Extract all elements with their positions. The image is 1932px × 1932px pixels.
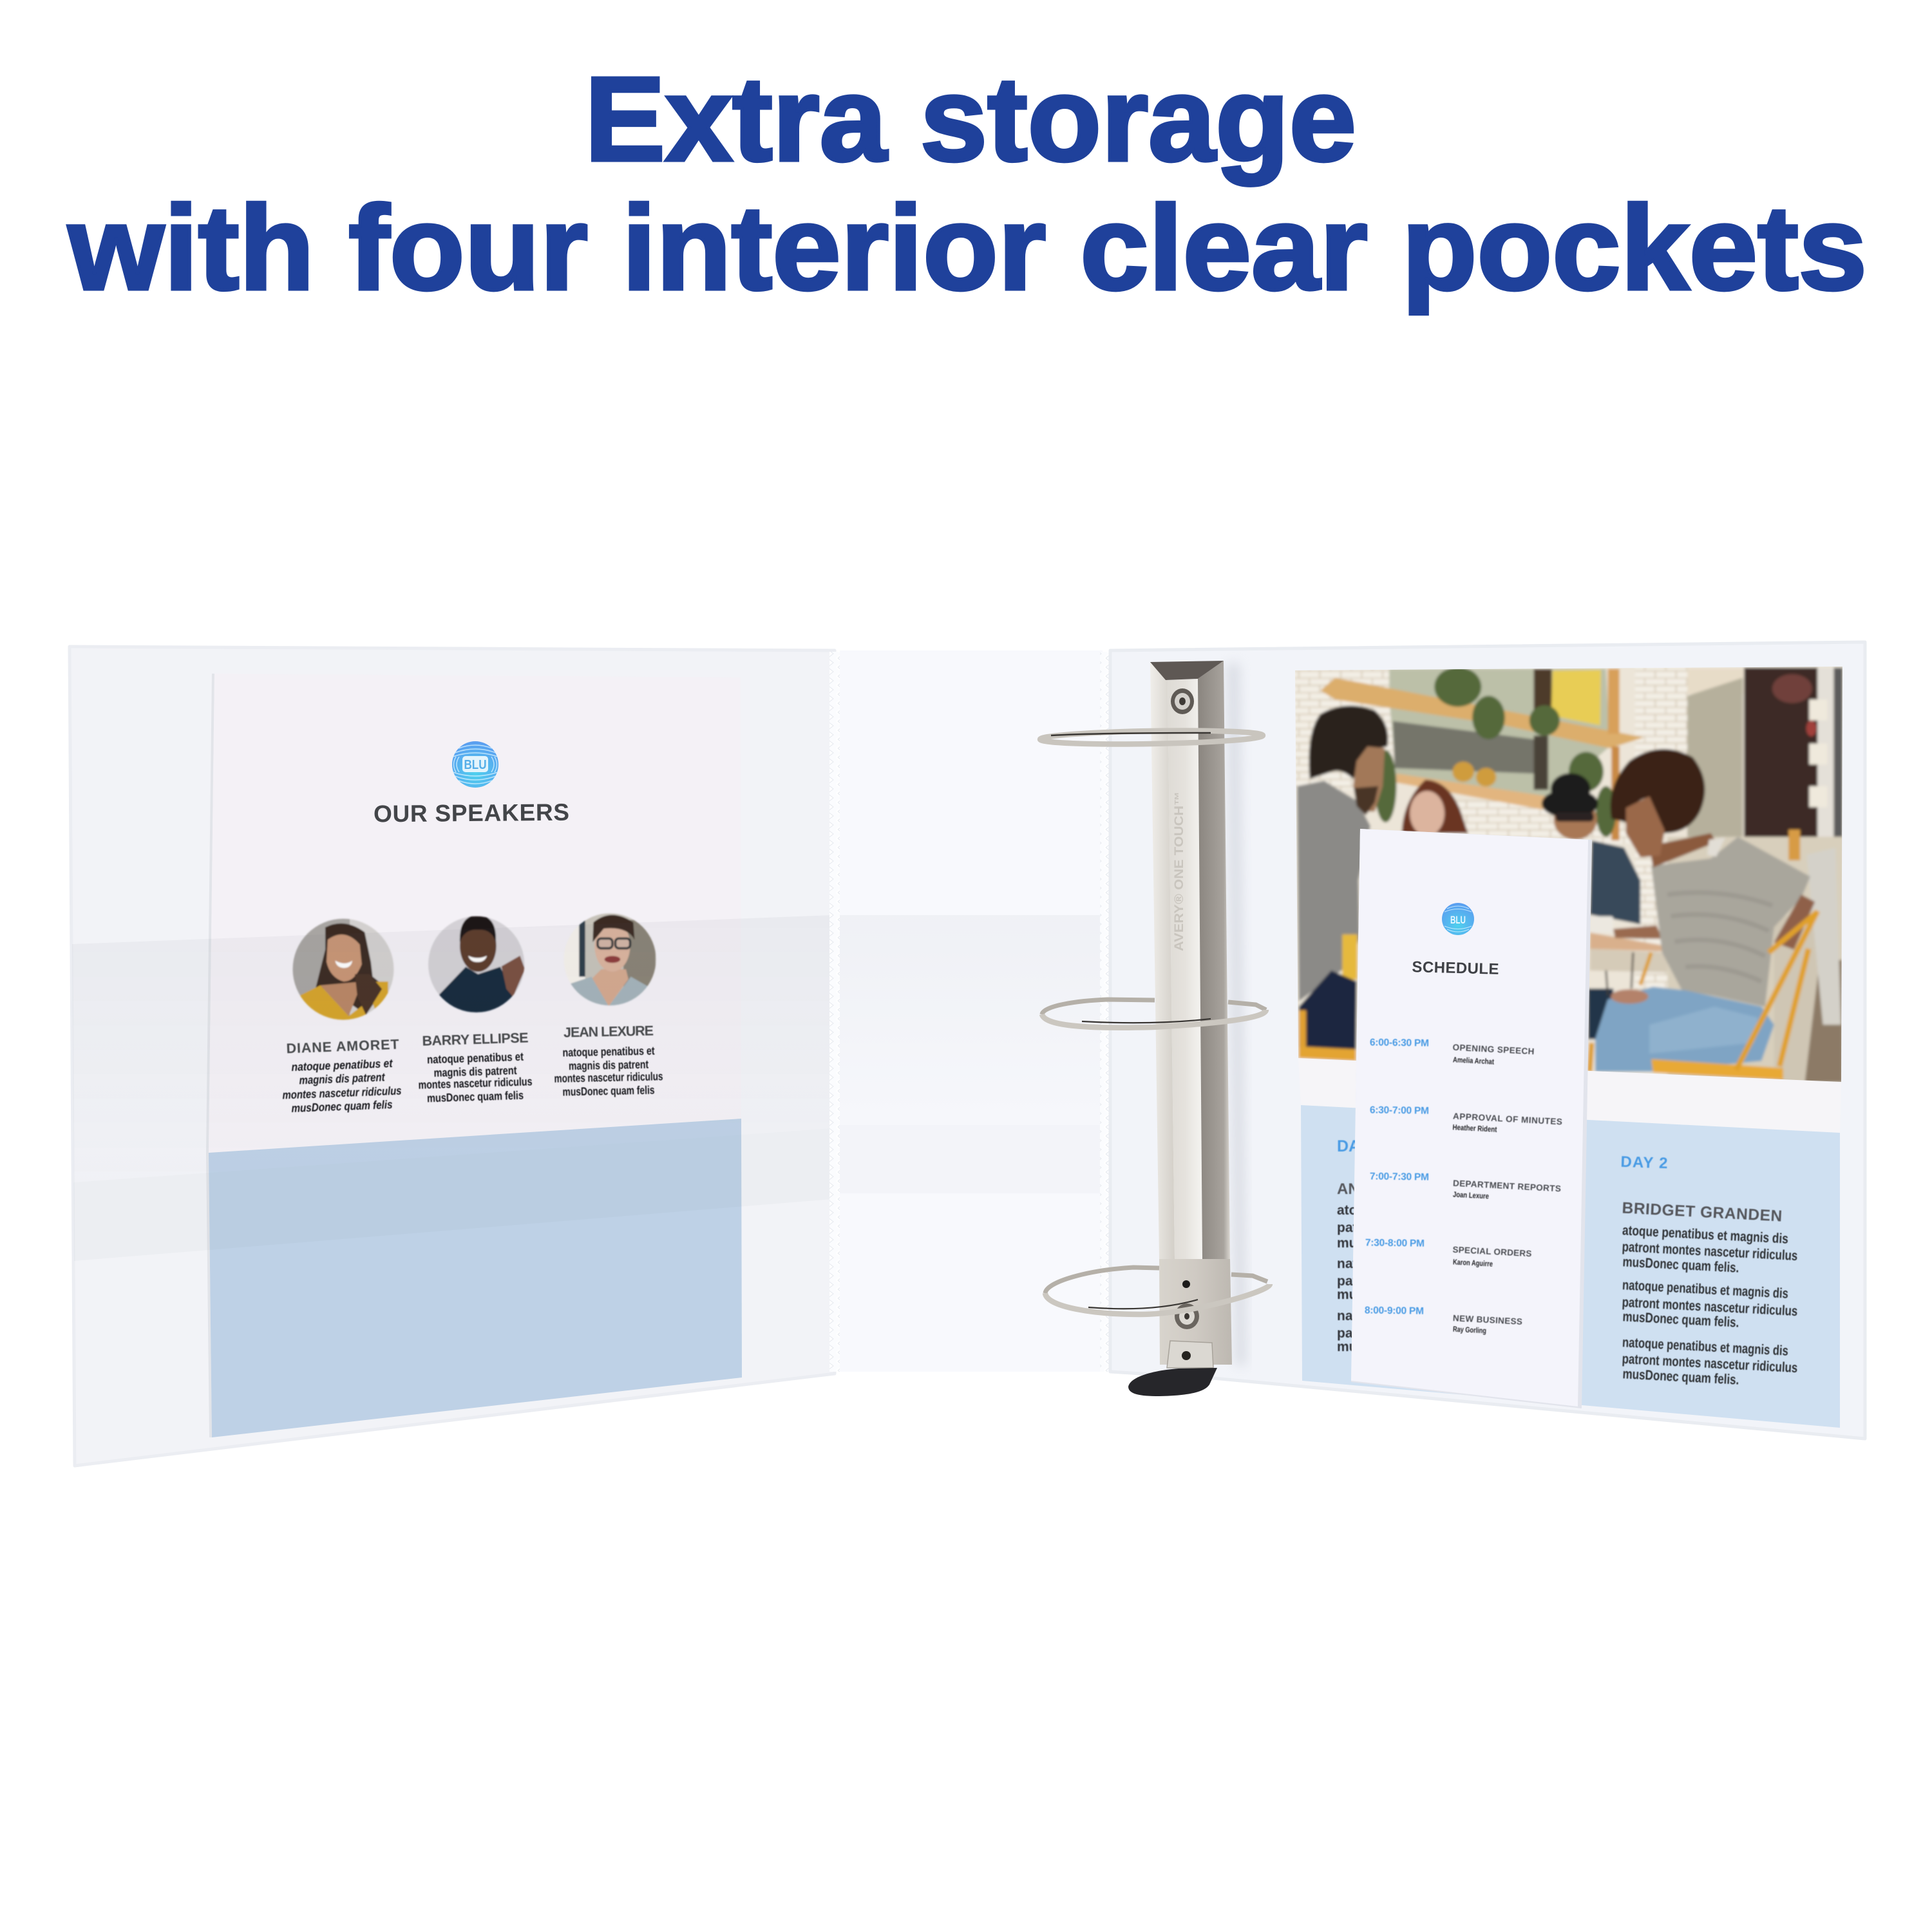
speaker 1 text: magnis dis patrent xyxy=(299,1070,386,1087)
speaker 2 text: montes nascetur ridiculus xyxy=(418,1075,533,1092)
bar top recess xyxy=(1150,661,1224,680)
chair xyxy=(1651,1059,1783,1080)
day 1 partly hidden text: mu xyxy=(1337,1287,1358,1302)
icon: BLU logo small xyxy=(1442,903,1474,935)
speaker 3 text: magnis dis patrent xyxy=(569,1058,649,1072)
speaker 1 portrait xyxy=(290,918,397,1022)
day 2 text block: BRIDGET GRANDEN xyxy=(1622,1200,1783,1225)
left cover base xyxy=(70,647,835,1466)
day 1 partly hidden text: mu xyxy=(1337,1340,1358,1354)
panel: left cover with clear pocket xyxy=(70,647,840,1466)
day 1 partly hidden text: pat xyxy=(1337,1326,1358,1341)
title xyxy=(68,53,1867,315)
yellow box xyxy=(1551,670,1601,726)
speaker 3 text: JEAN LEXURE xyxy=(564,1023,654,1040)
day 1 partly hidden text: ato xyxy=(1337,1203,1358,1218)
jeans xyxy=(1595,987,1774,1072)
photo page xyxy=(1288,663,1855,1428)
title line 1: Extra storage xyxy=(585,53,1356,186)
panel: right cover with clear pocket xyxy=(1110,642,1865,1439)
right background xyxy=(1667,837,1844,1083)
lower eyelet xyxy=(1175,1303,1199,1329)
schedule times: 6:00-6:30 PM xyxy=(1370,1037,1429,1049)
bar right strip xyxy=(1198,661,1230,1259)
ring 2 xyxy=(1042,1010,1266,1028)
ring 3 xyxy=(1045,1284,1270,1314)
card shadow edge xyxy=(1351,829,1592,1408)
top eyelet xyxy=(1171,688,1194,714)
schedule times: 8:00-9:00 PM xyxy=(1365,1305,1424,1317)
day 1 partly hidden text: nat xyxy=(1337,1256,1358,1271)
schedule items: SPECIAL ORDERS xyxy=(1452,1245,1532,1258)
bottom clip xyxy=(1167,1341,1213,1368)
day 1 partly hidden text: mu xyxy=(1337,1236,1358,1251)
speaker 2 text: magnis dis patrent xyxy=(433,1064,517,1079)
shelves xyxy=(1321,677,1644,748)
right cover base xyxy=(1110,642,1865,1439)
speaker 3 text xyxy=(554,1023,663,1098)
schedule items xyxy=(1452,1043,1562,1335)
card sheet xyxy=(1351,829,1588,1406)
schedule items: Joan Lexure xyxy=(1453,1190,1490,1200)
panel: spine xyxy=(840,650,1110,1372)
heading: schedule: SCHEDULE xyxy=(1412,958,1499,978)
ring 2 back arc xyxy=(1042,999,1266,1014)
icon: black locking tab xyxy=(1128,1368,1217,1396)
speaker 2 portrait xyxy=(426,915,527,1019)
icon: BLU logo small: BLU xyxy=(1450,914,1466,926)
door and window xyxy=(1687,668,1743,694)
schedule times xyxy=(1365,1037,1429,1317)
recess behind shelves xyxy=(1389,668,1609,800)
embossed brand text: AVERY® ONE TOUCH™ xyxy=(1173,791,1186,951)
day 1 partly hidden text xyxy=(1337,1137,1360,1354)
day 2 text block: musDonec quam felis. xyxy=(1622,1309,1739,1331)
speaker 1 text: DIANE AMORET xyxy=(286,1037,399,1056)
ring 1 xyxy=(1040,729,1263,746)
day 2 text block: patront montes nascetur ridiculus xyxy=(1622,1294,1798,1319)
clear pocket band upper xyxy=(72,915,832,1182)
woman right xyxy=(1651,837,1810,1007)
schedule times: 7:30-8:00 PM xyxy=(1365,1237,1425,1249)
speaker 1 text xyxy=(282,1037,402,1115)
lower hole xyxy=(1182,1280,1190,1288)
page sheet xyxy=(209,674,741,1153)
speaker 3 portrait xyxy=(562,911,659,1010)
speaker 1 text: natoque penatibus et xyxy=(291,1057,393,1074)
speaker 3 text: montes nascetur ridiculus xyxy=(554,1070,663,1085)
day 1 partly hidden text: nat xyxy=(1337,1309,1358,1323)
inserted page: our speakers xyxy=(206,674,742,1437)
man xyxy=(1297,781,1370,1001)
clear pocket band lower xyxy=(73,1128,832,1261)
day 2 text block: natoque penatibus et magnis dis xyxy=(1622,1334,1788,1359)
schedule items: Heather Rident xyxy=(1452,1122,1497,1134)
ring 3 back arc xyxy=(1045,1267,1267,1293)
page shadow xyxy=(206,674,214,1437)
schedule items: Ray Gorling xyxy=(1453,1325,1486,1335)
spine base xyxy=(840,650,1103,1372)
day 2 text block xyxy=(1620,1153,1798,1388)
speaker 1 text: montes nascetur ridiculus xyxy=(282,1084,402,1102)
day 2 text block: patront montes nascetur ridiculus xyxy=(1622,1351,1798,1376)
bottom hole xyxy=(1182,1351,1191,1360)
schedule items: APPROVAL OF MINUTES xyxy=(1453,1112,1562,1126)
speaker 2 text: natoque penatibus et xyxy=(427,1050,524,1066)
bar left strip xyxy=(1150,662,1175,1259)
day 2 text block: musDonec quam felis. xyxy=(1622,1366,1739,1388)
bar lower section xyxy=(1159,1259,1232,1365)
day 1 partly hidden text: pat xyxy=(1337,1274,1358,1289)
hat man xyxy=(1590,840,1640,924)
schedule items: NEW BUSINESS xyxy=(1453,1313,1522,1327)
day 2 text block: musDonec quam felis. xyxy=(1622,1254,1739,1276)
schedule times: 6:30-7:00 PM xyxy=(1370,1104,1429,1117)
spine band upper xyxy=(840,915,1103,1125)
schedule items: DEPARTMENT REPORTS xyxy=(1453,1179,1561,1193)
icon: BLU logo: BLU xyxy=(464,758,487,772)
schedule items: Karon Aguirre xyxy=(1453,1257,1493,1269)
cafe photograph xyxy=(1288,663,1855,1097)
day 2 text block: atoque penatibus et magnis dis xyxy=(1622,1222,1788,1247)
mechanism shadow xyxy=(1227,663,1246,1365)
spine band lower xyxy=(840,1125,1103,1193)
speaker 3 text: musDonec quam felis xyxy=(562,1084,655,1098)
day 2 text block: patront montes nascetur ridiculus xyxy=(1622,1239,1798,1264)
table xyxy=(1590,949,1667,972)
schedule card xyxy=(1351,829,1592,1408)
day 1 partly hidden text: AN xyxy=(1337,1180,1359,1198)
title line 2: with four interior clear pockets xyxy=(68,182,1867,315)
pocket seam xyxy=(829,652,840,1372)
bar centre strip xyxy=(1168,679,1202,1259)
page blue footer xyxy=(209,1119,742,1437)
speaker 1 text: musDonec quam felis xyxy=(291,1098,393,1115)
heading: our speakers: OUR SPEAKERS xyxy=(374,799,569,827)
speaker 2 text: musDonec quam felis xyxy=(427,1089,524,1104)
schedule times: 7:00-7:30 PM xyxy=(1370,1171,1429,1183)
day 1 partly hidden text: DA xyxy=(1337,1137,1360,1155)
woman centre xyxy=(1402,780,1468,833)
spine seam xyxy=(1100,652,1110,1372)
speaker 2 text xyxy=(418,1030,533,1104)
schedule items: OPENING SPEECH xyxy=(1452,1043,1535,1056)
day 2 text block: natoque penatibus et magnis dis xyxy=(1622,1277,1788,1302)
speaker 2 text: BARRY ELLIPSE xyxy=(422,1030,529,1049)
speaker portraits xyxy=(290,911,659,1022)
page blue area xyxy=(1301,1105,1840,1428)
wall xyxy=(1288,663,1855,1097)
schedule items: Amelia Archat xyxy=(1453,1055,1494,1066)
day 2 text block: DAY 2 xyxy=(1620,1153,1668,1172)
page sheet lower xyxy=(1298,1058,1841,1133)
day 1 partly hidden text: pat xyxy=(1337,1220,1358,1235)
icon: BLU logo xyxy=(452,741,498,788)
speaker 3 text: natoque penatibus et xyxy=(562,1045,655,1059)
metal bar xyxy=(1150,661,1232,1368)
ring metal mechanism xyxy=(1040,661,1270,1396)
plants xyxy=(1375,667,1616,837)
